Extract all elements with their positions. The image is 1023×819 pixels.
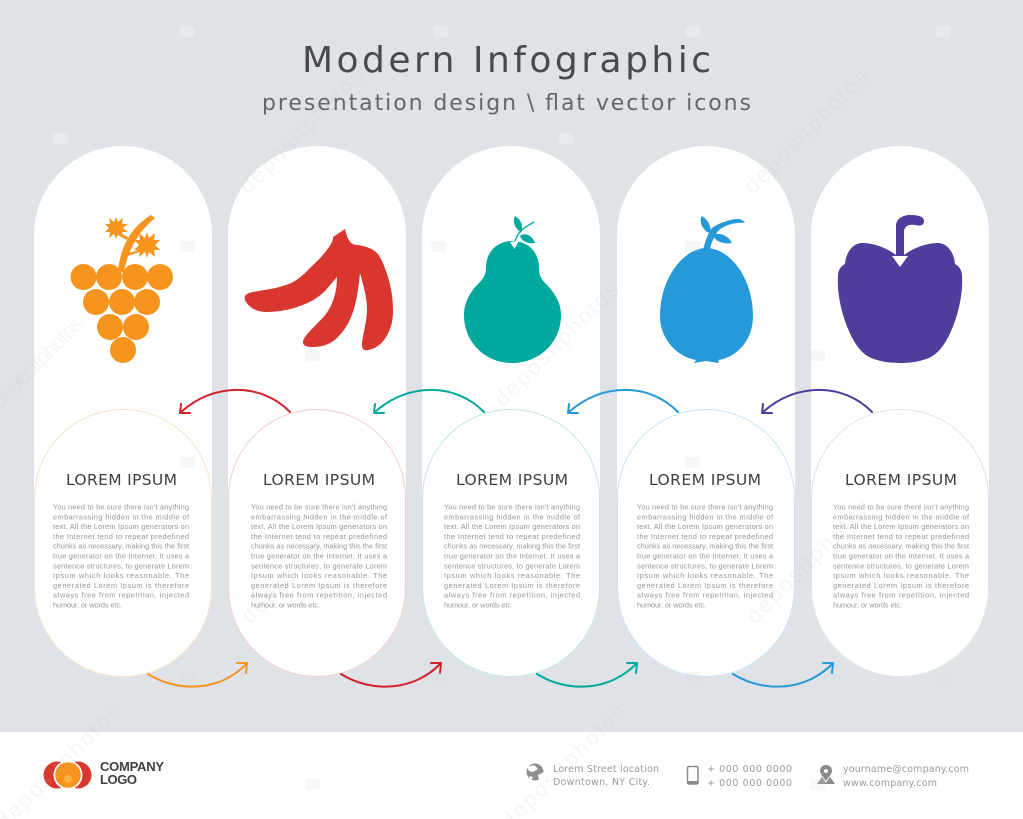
text block: column 4: embarrassing hidden in the middle of (637, 512, 774, 521)
text block: column 1: the Internet tend to repeat predefined (53, 532, 189, 541)
text block: column 3: sentence structures, to generate Lorem (444, 561, 580, 570)
text block: column 4: humour, or words etc. (637, 600, 706, 610)
text block: column 2: You need to be sure there isn't anything (251, 502, 387, 512)
text block: column 1: always free from repetition, injected (53, 591, 189, 600)
text block: column 4 (637, 502, 774, 610)
icon: location pin (817, 765, 835, 784)
text block: column 5: humour, or words etc. (833, 600, 902, 610)
title: Modern Infographic (302, 40, 711, 81)
text block: column 4: true generator on the Internet. It uses a (637, 552, 774, 560)
text block: column 3: Ipsum which looks reasonable. The (444, 571, 580, 580)
panel: text oval 4 (618, 410, 794, 676)
contact: web (843, 764, 969, 789)
icon: guava (660, 216, 753, 363)
text block: column 4: You need to be sure there isn't anything (637, 502, 773, 512)
heading: column 2: LOREM IPSUM (263, 471, 375, 489)
text block: column 3: text. All the Lorem Ipsum generators on (444, 522, 580, 531)
panel: text oval 1 (34, 410, 212, 676)
text block: column 1: text. All the Lorem Ipsum generators on (53, 522, 189, 531)
text block: column 2: true generator on the Internet. It uses a (251, 552, 388, 560)
text block: column 5: generated Lorem Ipsum is therefore (833, 581, 969, 590)
text block: column 4: Ipsum which looks reasonable. The (637, 571, 773, 580)
company logo text: LOGO (100, 772, 137, 787)
contact: address (553, 764, 659, 788)
watermarks: depositphotos (236, 494, 370, 629)
text block: column 1 (53, 502, 190, 610)
text block: column 5: sentence structures, to generate Lorem (833, 561, 969, 570)
text block: column 1: Ipsum which looks reasonable. The (53, 571, 189, 580)
text block: column 5 (833, 502, 970, 610)
text block: column 5: You need to be sure there isn't anything (833, 502, 969, 512)
text block: column 2: Ipsum which looks reasonable. The (251, 571, 387, 580)
heading: column 3: LOREM IPSUM (456, 471, 568, 489)
footer band (0, 732, 1023, 819)
heading: column 4: LOREM IPSUM (649, 471, 761, 489)
text block: column 3: generated Lorem Ipsum is therefore (444, 581, 580, 590)
arrow: blue forward (733, 663, 833, 687)
text block: column 1: generated Lorem Ipsum is therefore (53, 581, 189, 590)
contact: address: Downtown, NY City. (553, 777, 650, 788)
arrow: teal back (374, 390, 484, 413)
panel: text oval 2 (228, 410, 406, 676)
panel: text oval 5 (812, 410, 988, 676)
contact: address: Lorem Street location (553, 764, 659, 775)
contact: web: www.company.com (843, 778, 937, 789)
icon: phone (688, 766, 698, 784)
arrow: red back (180, 390, 290, 413)
text block: column 3: You need to be sure there isn't anything (444, 502, 580, 512)
icon: bell pepper (838, 215, 962, 363)
contact: web: yourname@company.com (843, 764, 969, 775)
arrow: red forward (341, 663, 441, 687)
text block: column 1: true generator on the Internet. It uses a (53, 552, 190, 560)
text block: column 3: always free from repetition, injected (444, 591, 580, 600)
watermarks: depositphotos (741, 494, 875, 629)
contact: phones: + 000 000 0000 (707, 764, 792, 775)
text block: column 5: the Internet tend to repeat predefined (833, 532, 969, 541)
text block: column 2: embarrassing hidden in the middle of (251, 512, 388, 521)
text block: column 2: humour, or words etc. (251, 600, 320, 610)
text block: column 5: true generator on the Internet. It uses a (833, 552, 970, 560)
company logo text: COMPANY (100, 759, 164, 774)
text block: column 3: the Internet tend to repeat predefined (444, 532, 580, 541)
subtitle: presentation design \ flat vector icons (262, 91, 751, 116)
text block: column 1: chunks as necessary, making this the first (53, 542, 189, 551)
text block: column 3: chunks as necessary, making this the first (444, 542, 580, 551)
panel: text oval 3 (422, 410, 600, 676)
panel: column 4 background (617, 146, 795, 677)
text block: column 2: chunks as necessary, making this the first (251, 542, 387, 551)
arrow: orange forward (148, 663, 247, 687)
heading: column 5: LOREM IPSUM (845, 471, 957, 489)
text block: column 4: text. All the Lorem Ipsum generators on (637, 522, 773, 531)
panel: column 2 background (228, 146, 406, 677)
panel: column 1 background (34, 146, 212, 677)
panel: column 3 background (422, 146, 600, 677)
arrow: blue back (568, 390, 678, 413)
contact: phones: + 000 000 0000 (707, 778, 792, 789)
text block: column 2: generated Lorem Ipsum is therefore (251, 581, 387, 590)
text block: column 2: always free from repetition, injected (251, 591, 387, 600)
text block: column 1: You need to be sure there isn't anything (53, 502, 189, 512)
text block: column 2 (251, 502, 388, 610)
watermarks: depositphotos (739, 64, 873, 199)
text block: column 3: true generator on the Internet. It uses a (444, 552, 581, 560)
text block: column 5: text. All the Lorem Ipsum generators on (833, 522, 969, 531)
text block: column 5: embarrassing hidden in the middle of (833, 512, 970, 521)
company logo mark (44, 760, 92, 790)
text block: column 4: generated Lorem Ipsum is therefore (637, 581, 773, 590)
text block: column 5: Ipsum which looks reasonable. The (833, 571, 969, 580)
text block: column 4: sentence structures, to generate Lorem (637, 561, 773, 570)
text block: column 3: embarrassing hidden in the middle of (444, 512, 581, 521)
text block: column 4: the Internet tend to repeat predefined (637, 532, 773, 541)
arrow: teal forward (537, 663, 637, 687)
text block: column 1: embarrassing hidden in the middle of (53, 512, 190, 521)
text block: column 3: humour, or words etc. (444, 600, 513, 610)
text block: column 2: the Internet tend to repeat predefined (251, 532, 387, 541)
text block: column 2: text. All the Lorem Ipsum generators on (251, 522, 387, 531)
text block: column 4: always free from repetition, injected (637, 591, 773, 600)
icon: globe (526, 764, 544, 781)
heading: column 1: LOREM IPSUM (66, 471, 177, 489)
text block: column 5: chunks as necessary, making this the first (833, 542, 969, 551)
panel: column 5 background (811, 146, 989, 677)
text block: column 2: sentence structures, to generate Lorem (251, 561, 387, 570)
contact: phones (707, 764, 792, 789)
watermarks: depositphotos (234, 64, 368, 199)
watermarks: depositphotos (489, 277, 623, 412)
text block: column 1: humour, or words etc. (53, 600, 122, 610)
icon: grapes (70, 215, 173, 363)
text block: column 1: sentence structures, to generate Lorem (53, 561, 189, 570)
arrow: purple back (762, 390, 872, 413)
icon: bananas (245, 229, 393, 350)
text block: column 5: always free from repetition, injected (833, 591, 969, 600)
company logo text (100, 759, 164, 787)
text block: column 3 (444, 502, 581, 610)
icon: pear (464, 216, 561, 363)
text block: column 4: chunks as necessary, making this the first (637, 542, 773, 551)
